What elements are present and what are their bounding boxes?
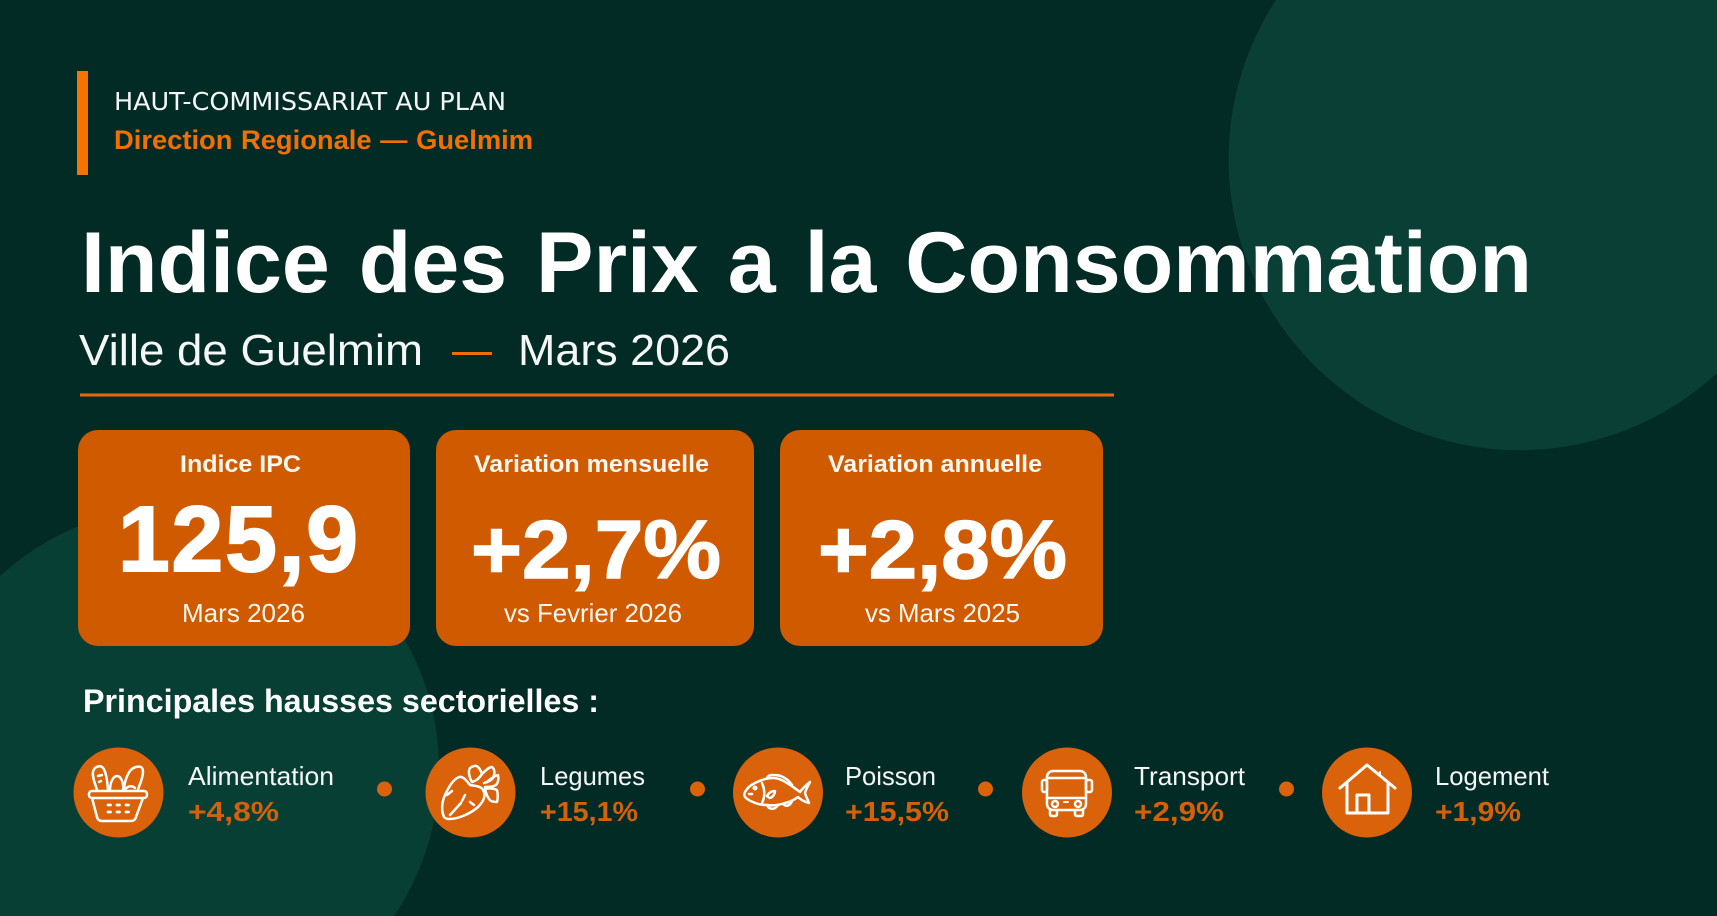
sector value: +15,5%: [845, 796, 949, 827]
card label: Variation annuelle: [828, 451, 1042, 478]
header block: [77, 71, 533, 175]
sector value: +1,9%: [1435, 796, 1521, 827]
period: Mars 2026: [518, 326, 730, 375]
header rule: [80, 394, 1114, 396]
icon: house: [1322, 748, 1412, 838]
separator dot: [690, 782, 705, 796]
regional direction: Direction Regionale — Guelmim: [114, 125, 533, 155]
card note: vs Fevrier 2026: [504, 598, 682, 628]
card value: +2,8%: [818, 503, 1067, 596]
KPI card: Variation annuelle: [780, 430, 1103, 646]
sector name: Logement: [1435, 761, 1550, 791]
icon: basket: [74, 748, 164, 838]
separator dot: [1279, 782, 1294, 796]
decorative circle: top right: [1229, 0, 1717, 450]
subtitle dash: [452, 352, 492, 355]
title: Indice des Prix a la Consommation: [81, 215, 1532, 311]
sector name: Legumes: [540, 761, 645, 791]
card note: Mars 2026: [182, 598, 305, 628]
sector: Alimentation: [74, 748, 334, 838]
card note: vs Mars 2025: [865, 598, 1020, 628]
subtitle: [79, 326, 730, 375]
KPI card: Variation mensuelle: [436, 430, 754, 646]
accent bar: [77, 71, 88, 175]
sector name: Alimentation: [188, 761, 334, 791]
decorative circle: bottom left: [0, 507, 439, 916]
separator dot: [377, 782, 392, 796]
sector value: +4,8%: [188, 796, 279, 827]
card value: +2,7%: [471, 503, 721, 596]
icon: carrot: [426, 748, 516, 838]
card value: 125,9: [118, 487, 358, 591]
city: Ville de Guelmim: [79, 326, 423, 375]
organisation name: HAUT-COMMISSARIAT AU PLAN: [114, 87, 506, 116]
sector: Transport: [1022, 748, 1246, 838]
card label: Indice IPC: [180, 451, 301, 478]
sector name: Transport: [1134, 761, 1246, 791]
sector: Logement: [1322, 748, 1550, 838]
icon: fish: [733, 748, 823, 838]
sector: Poisson: [733, 748, 949, 838]
separator dot: [978, 782, 993, 796]
KPI card: Indice IPC: [78, 430, 410, 646]
icon: bus: [1022, 748, 1112, 838]
section heading: Principales hausses sectorielles :: [83, 683, 599, 719]
card label: Variation mensuelle: [474, 451, 709, 478]
sector name: Poisson: [845, 761, 936, 791]
sector: Legumes: [426, 748, 645, 838]
sector value: +2,9%: [1134, 796, 1224, 827]
sector value: +15,1%: [540, 796, 638, 827]
